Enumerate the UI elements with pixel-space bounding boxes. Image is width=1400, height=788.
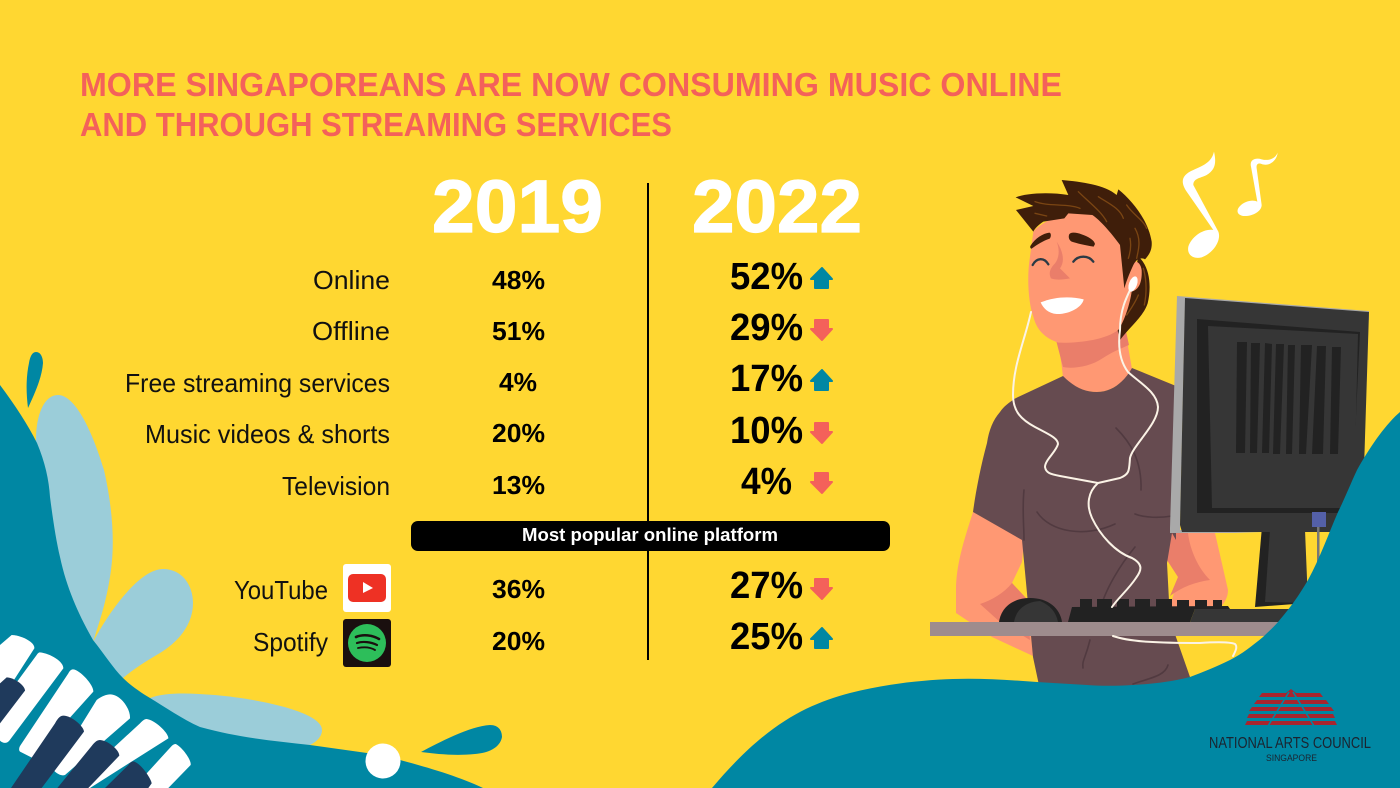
2019 values: 48%: [492, 265, 545, 295]
2019 values: 13%: [492, 470, 545, 500]
eyes: [1033, 257, 1093, 265]
monitor stand: [1255, 515, 1308, 607]
monitor plug and cable: [1312, 512, 1326, 572]
head: [1016, 180, 1152, 343]
eyebrows: [1030, 233, 1095, 249]
row labels: Spotify: [253, 627, 328, 657]
mouse: [999, 598, 1062, 622]
hair strands: [1035, 192, 1147, 315]
row labels: [125, 265, 390, 657]
2019 values: 20%: [492, 626, 545, 656]
earphone cables: [1013, 284, 1236, 656]
banner: most popular online platform: [411, 521, 890, 551]
monitor: [1170, 296, 1369, 533]
monitor stripes: [1236, 342, 1341, 454]
nose: [1050, 242, 1070, 280]
back hair: [1117, 257, 1150, 340]
row labels: Television: [282, 471, 390, 501]
2019 values: 36%: [492, 574, 545, 604]
keyboard: [1068, 599, 1230, 622]
earbud: [1127, 275, 1139, 293]
row labels: Free streaming services: [125, 368, 390, 398]
bottom-right wave: [712, 412, 1400, 788]
front hair: [1016, 180, 1152, 288]
mouth: [1041, 297, 1084, 314]
2022 values: [730, 256, 803, 658]
icon: music notes: [1183, 152, 1278, 258]
column divider: [647, 183, 649, 660]
icon: piano keys: [0, 635, 191, 788]
face: [1028, 210, 1142, 343]
logo mark: [1245, 689, 1337, 726]
2019 values: [492, 265, 545, 656]
2022 values: 17%: [730, 358, 803, 400]
title: [80, 66, 1062, 143]
2019 values: 51%: [492, 316, 545, 346]
banner: most popular online platform: Most popular online platform: [522, 525, 778, 545]
logo: National Arts Council: [1209, 689, 1371, 764]
icon: Spotify: [343, 619, 391, 667]
bottom-left splash decoration: [0, 352, 502, 788]
logo: National Arts Council: SINGAPORE: [1266, 753, 1317, 764]
row labels: YouTube: [234, 575, 328, 605]
2022 values: 27%: [730, 565, 803, 607]
title: AND THROUGH STREAMING SERVICES: [80, 106, 672, 143]
icon: YouTube: [343, 564, 391, 612]
title: MORE SINGAPOREANS ARE NOW CONSUMING MUSIC ONLINE: [80, 66, 1062, 103]
left arm: [956, 512, 1033, 656]
desk: [930, 622, 1290, 636]
row labels: Music videos & shorts: [145, 419, 390, 449]
row labels: Online: [313, 265, 390, 295]
2022 values: 25%: [730, 616, 803, 658]
2022 values: 10%: [730, 410, 803, 452]
row labels: Offline: [312, 316, 390, 346]
change arrows: [811, 268, 832, 648]
2019 values: 20%: [492, 418, 545, 448]
shirt: [973, 368, 1190, 690]
heading: 2019: 2019: [432, 165, 603, 248]
2019 values: 4%: [499, 367, 537, 397]
stand base: [1190, 609, 1300, 622]
right arm: [1167, 533, 1228, 608]
heading: 2022: 2022: [692, 165, 862, 248]
2022 values: 52%: [730, 256, 803, 298]
2022 values: 4%: [741, 461, 792, 503]
neck: [1058, 335, 1132, 392]
illustration: man at computer: [930, 180, 1369, 690]
2022 values: 29%: [730, 307, 803, 349]
